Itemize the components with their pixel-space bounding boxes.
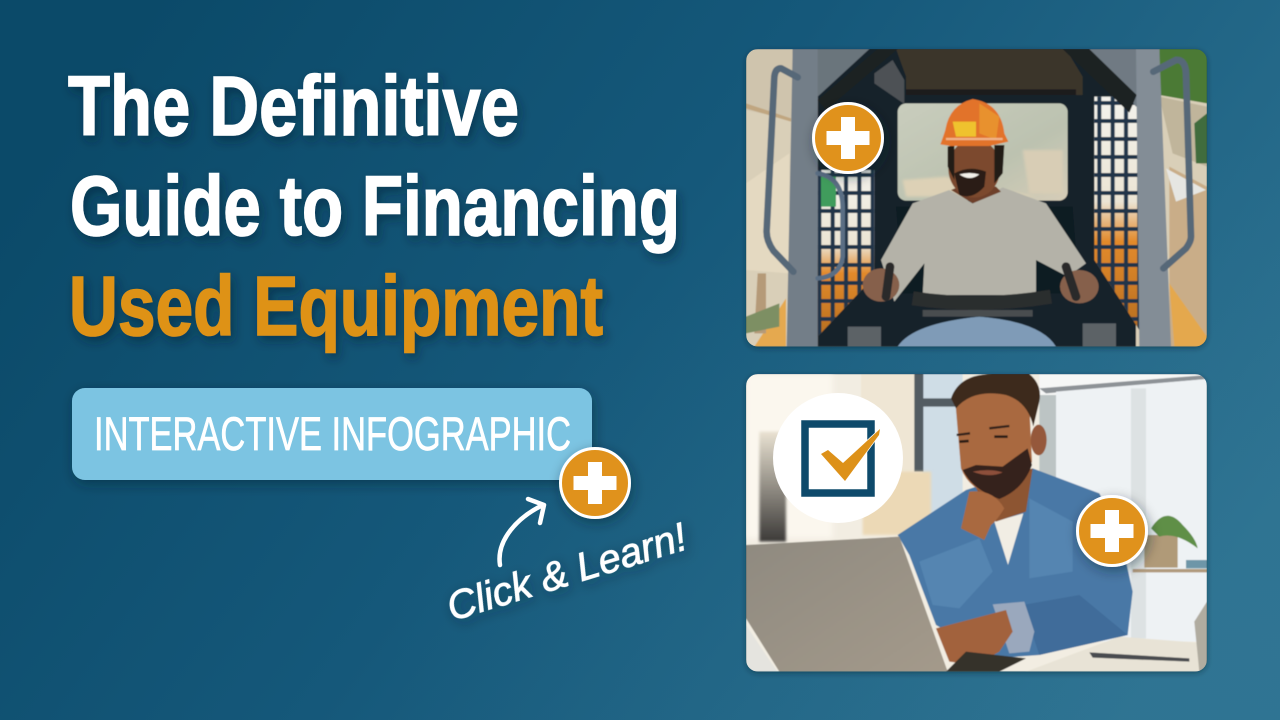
beard — [963, 448, 1032, 499]
title — [68, 59, 680, 353]
desk — [1026, 637, 1207, 672]
panel: man at laptop photo — [746, 374, 1207, 672]
shirt — [881, 187, 1086, 302]
cab grilles — [818, 97, 1139, 337]
arrow: curved pointer to plus button — [500, 499, 544, 565]
photo scene — [746, 49, 1207, 347]
badge: interactive infographic — [72, 388, 592, 480]
hair — [951, 374, 1040, 427]
jeans — [898, 317, 1056, 347]
hard hat — [940, 99, 1008, 146]
shelf and plant — [1133, 516, 1207, 572]
cuff — [993, 602, 1034, 653]
t-shirt — [994, 513, 1023, 565]
cab pillars — [787, 49, 818, 347]
jacket — [898, 468, 1133, 658]
panel: operator in skid steer photo — [746, 49, 1207, 347]
icon: white circle with checkbox — [773, 393, 903, 523]
steering bar — [913, 297, 1051, 303]
panel shadow — [746, 374, 1207, 672]
floor lamp and furniture — [759, 432, 786, 542]
badge background — [72, 388, 592, 480]
photo scene — [746, 374, 1207, 672]
icon: plus button on operator photo — [814, 104, 882, 172]
white circle — [773, 393, 903, 523]
title line 2: Guide to Financing — [70, 159, 680, 253]
title line 3: highlighted: Used Equipment — [69, 259, 603, 353]
hand at chin — [961, 491, 1004, 540]
laptop — [746, 537, 1026, 672]
handwritten callout: Click & Learn! — [442, 515, 692, 630]
cab window — [898, 103, 1068, 201]
check mark — [821, 429, 880, 481]
hands — [863, 268, 899, 302]
eyes and brows — [957, 426, 1009, 435]
man — [898, 374, 1133, 665]
icon: plus button on badge — [560, 448, 630, 518]
operator — [863, 99, 1099, 347]
cab ceiling — [896, 49, 1083, 95]
checkbox square — [805, 424, 871, 493]
head — [948, 145, 999, 198]
cab top corners — [817, 49, 870, 97]
seat back — [896, 207, 1079, 293]
badge label: INTERACTIVE INFOGRAPHIC — [94, 408, 571, 461]
typing hand — [936, 610, 1013, 665]
ear — [1031, 425, 1047, 455]
panel shadow — [746, 49, 1207, 347]
cab interior — [818, 49, 1136, 347]
title line 1: The Definitive — [68, 59, 519, 153]
neck — [951, 187, 1001, 203]
neck — [976, 468, 1033, 522]
face — [955, 391, 1032, 497]
icon: plus button on laptop photo — [1078, 496, 1146, 566]
side handles — [767, 60, 1191, 278]
seat latches — [848, 323, 1116, 347]
